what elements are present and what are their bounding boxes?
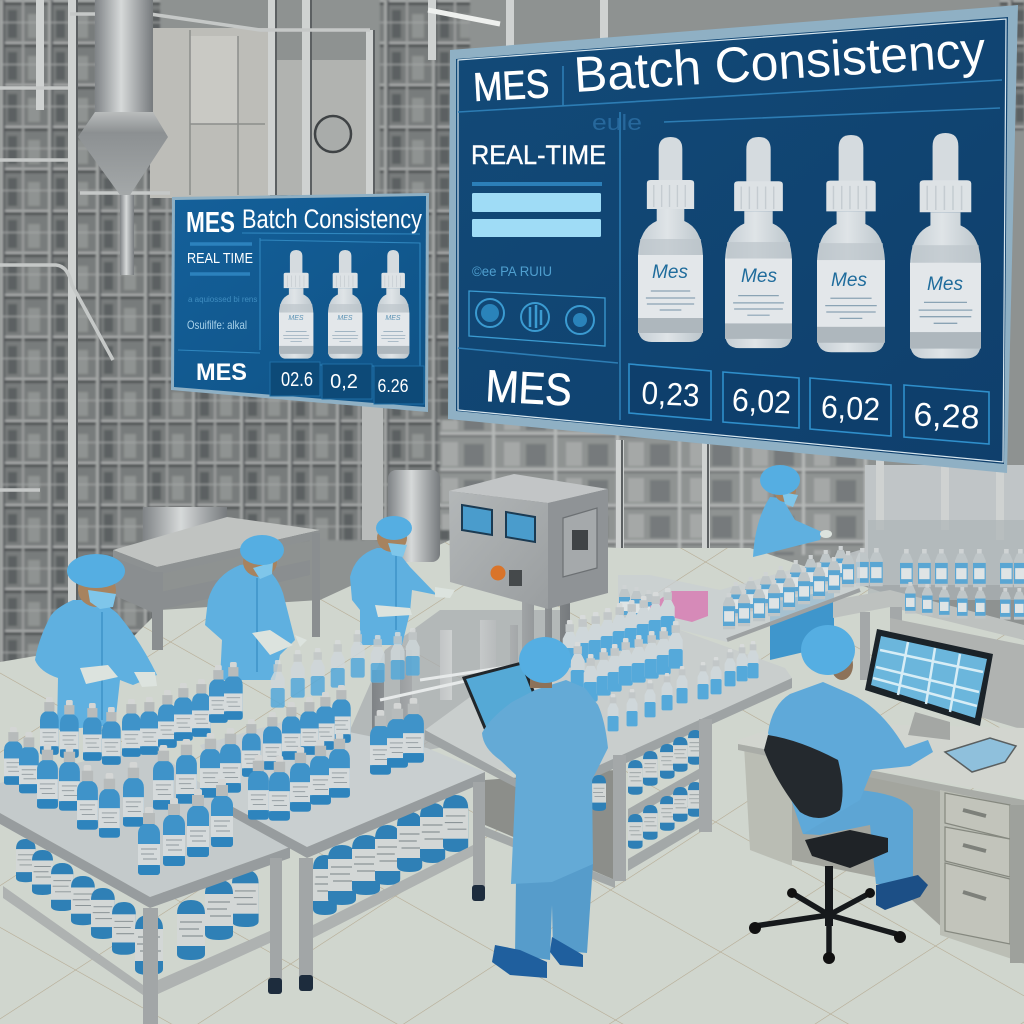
top surface [0,745,290,897]
operator desk [738,722,1024,964]
desk top [738,722,1024,798]
shoes [492,945,547,978]
front right table [200,720,485,991]
worker: far right [753,465,834,660]
glass vessels behind bottles [868,520,1024,600]
panel title: MES [186,207,235,239]
coat [482,680,608,884]
bottle labels: Mes [652,262,688,283]
gloves [80,665,157,687]
legs [803,790,913,884]
under desk shadow [792,755,945,930]
structural columns and pipes [40,0,1000,650]
bottle labels [652,262,963,295]
ceiling light [428,10,500,24]
bottle marks: MES [337,315,353,322]
column [825,866,833,926]
horizontal pipe runs [0,14,370,490]
left pedestal [744,745,792,866]
large wall panel [448,5,1018,473]
face side [831,650,853,680]
value boxes [629,364,989,444]
frame lines [178,233,422,400]
footer label: MES [196,359,247,386]
face [78,573,116,607]
background steel table and tanks [113,470,440,650]
value two: 6,02 [731,381,792,421]
wheels [749,922,761,934]
top surface [200,720,485,847]
screen one [462,505,492,535]
panel border lines [458,19,1006,462]
legs [613,719,712,881]
real time label: REAL-TIME [471,140,606,170]
shelf [313,845,473,938]
orange button [490,566,506,580]
value four: 6,28 [913,395,981,436]
bottle labels: Mes [927,274,963,295]
panel frame [171,193,429,412]
under centre table shadow [485,770,615,880]
chair back [764,735,843,818]
header dividers [458,66,1002,420]
drawers [945,793,1010,944]
desk leg [1010,805,1024,963]
status text: Osuifilfe: alkal [187,318,247,332]
office chair [749,735,906,964]
panel subtitle: Batch Consistency [572,21,987,103]
worker: middle [350,516,455,645]
rear wall panels [150,28,270,198]
value one: 02.6 [281,369,313,391]
status caption: ©ee PA RUIU [472,263,552,279]
panel subtitle: Batch Consistency [242,204,422,234]
small value boxes [270,362,424,404]
worker: left [35,554,157,730]
hair cover [67,554,125,588]
coat [35,600,157,730]
neck [530,676,552,688]
bottle marks: MES [385,315,401,322]
blue apron [770,590,834,660]
panel face [456,17,1008,464]
pink crate [650,591,708,622]
gauge on wall [315,116,351,152]
base [755,893,900,956]
value three: 6,02 [820,388,881,428]
panel bottles [638,133,981,358]
panel title: MES [472,62,550,110]
filler machinery [350,600,570,765]
lower shelf canisters [16,839,259,975]
drawer unit [940,790,1024,964]
table-top blue bottles [4,662,424,875]
value one: 0,23 [641,375,700,414]
bottle marks: MES [288,315,304,322]
status bars [190,244,252,274]
bottle labels: Mes [831,270,867,291]
side door [563,508,597,577]
tiled floor [0,540,1024,1024]
value three: 6.26 [378,376,408,396]
glove [820,530,832,538]
mask [88,590,116,609]
centre table bottles [563,588,759,731]
paper tablet on desk [945,738,1016,772]
drawer handles [963,810,986,899]
coat seam [101,612,103,720]
small wall panel [171,193,429,412]
top edge [0,813,290,908]
monitor [865,629,993,740]
bottle marks [288,315,401,322]
conveyor bottles [618,546,860,642]
top edge [233,772,485,858]
value two: 0,2 [330,371,358,393]
legs [143,858,282,1024]
equipment racks [0,0,1024,665]
feet [268,978,282,994]
bottle labels: Mes [741,266,777,287]
pale glass area [865,465,1024,585]
glass bottles on line [271,628,420,708]
chair seat [805,830,888,868]
legs [515,864,593,960]
hair cover [801,625,855,675]
screen two [506,512,535,542]
stainless hopper [78,0,168,275]
foot [876,875,928,910]
conveyor rail [727,590,860,640]
upper body [768,682,933,834]
status bars [472,182,602,237]
shelves [485,766,704,888]
right bottle cluster and counter [833,520,1024,730]
faint status text: a aquiossed bi rens [188,295,257,304]
panel frame [448,5,1018,473]
desk edge [738,744,1024,808]
footer label: MES [484,360,573,415]
small bottles [279,250,409,359]
panel face [174,196,426,407]
control cabinet [449,474,608,609]
tablet [464,663,537,733]
rear wall behind gauge [277,60,372,195]
real time label: REAL TIME [187,251,253,267]
wide column below small panel [362,405,383,540]
feet [299,975,313,991]
shelf [3,886,272,995]
centre table [425,630,792,888]
qr code [509,570,522,586]
icon group [469,291,605,346]
worker: seated [768,625,933,910]
faint label: eule [592,110,642,135]
hair cover [519,637,571,683]
front left table [0,745,290,1024]
worker: standing with tablet [482,637,608,978]
lower shelf canisters [313,795,468,915]
legs [299,782,485,985]
shelf canisters [592,730,703,849]
worker: middle left [205,535,307,680]
